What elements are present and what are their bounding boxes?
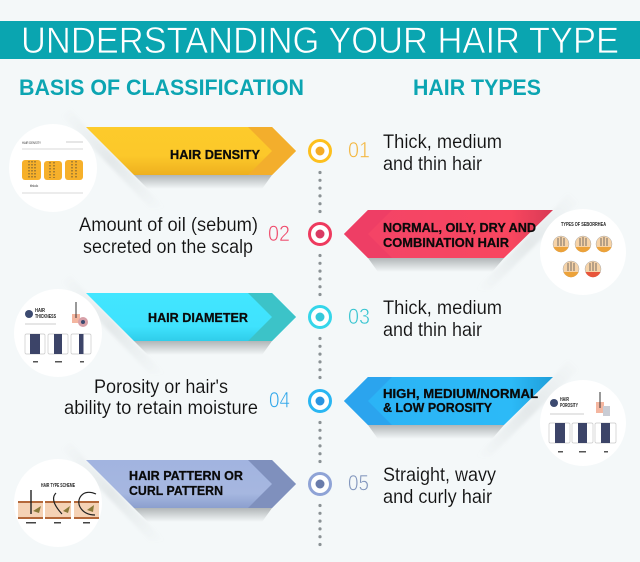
arrow tip: hair density [248, 127, 296, 175]
text: basis 02: secreted on the scalp [83, 236, 253, 258]
text: hair types 03 [383, 297, 502, 341]
thumbnail: types of seborrhea [540, 209, 626, 295]
number 05: 05 [348, 470, 369, 496]
number 03: 03 [348, 304, 370, 329]
label: sebum types: COMBINATION HAIR [383, 236, 509, 250]
arrow tip: sebum types [344, 210, 392, 258]
arrow tip: hair pattern [248, 460, 296, 508]
row 4: high, medium/normal and low porosity [344, 360, 626, 466]
label: hair pattern: HAIR PATTERN OR [129, 469, 243, 483]
thumbnail: hair type scheme [14, 459, 102, 547]
number 02: 02 [268, 221, 290, 246]
text: hair types 03: Thick, medium [383, 297, 502, 319]
thumbnail: hair thickness: THICKNESS [35, 314, 56, 320]
thumbnail: hair porosity [540, 380, 626, 466]
label: porosity: HIGH, MEDIUM/NORMAL [383, 387, 538, 401]
label: hair diameter: HAIR DIAMETER [148, 311, 248, 325]
row 2: marker [310, 224, 330, 244]
text: basis 02: Amount of oil (sebum) [79, 214, 258, 236]
text: basis 02 [79, 214, 258, 258]
row 5: hair pattern or curl pattern [14, 441, 296, 547]
text: hair types 01: Thick, medium [383, 131, 502, 153]
thumbnail: types of seborrhea: TYPES OF SEBORRHEA [561, 222, 606, 228]
text: hair types 05: Straight, wavy [383, 464, 496, 486]
thumbnail: hair type scheme: HAIR TYPE SCHEME [41, 483, 75, 489]
dotted timeline [318, 172, 322, 545]
number 01: 01 [348, 138, 370, 162]
label: hair pattern: CURL PATTERN [129, 484, 223, 498]
label: sebum types: NORMAL, OILY, DRY AND [383, 221, 536, 235]
thumbnail: hair density: HAIR DENSITY [22, 140, 41, 145]
text: hair types 01 [383, 131, 502, 175]
label: sebum types [383, 221, 536, 250]
arrow: hair diameter [86, 293, 296, 341]
label: porosity [383, 387, 538, 415]
arrow: hair density [86, 127, 296, 175]
label: porosity: & LOW POROSITY [383, 401, 493, 415]
arrow tip: porosity [344, 377, 392, 425]
text: hair types 01: and thin hair [383, 153, 482, 175]
row 4: marker [310, 390, 330, 412]
thumbnail: hair thickness [14, 289, 102, 377]
row 2: normal, oily, dry and combination hair [344, 193, 626, 295]
text: basis 04: Porosity or hair's [94, 376, 228, 398]
label: hair density: HAIR DENSITY [170, 148, 261, 162]
heading: basis of classification: BASIS OF CLASSIFICATION [19, 75, 304, 100]
thumbnail: hair density [9, 124, 97, 212]
arrow: hair pattern [86, 460, 296, 508]
thumbnail: hair porosity: POROSITY [560, 403, 578, 409]
thumbnail: hair thickness: HAIR [35, 308, 45, 314]
text: hair types 05: and curly hair [383, 486, 492, 508]
row 5: marker [310, 474, 330, 494]
row 1: hair density [9, 108, 296, 212]
number 04: 04 [269, 388, 290, 412]
arrow: sebum types [344, 210, 553, 258]
text: basis 04: ability to retain moisture [64, 397, 258, 419]
arrow: porosity [344, 377, 553, 425]
text: hair types 05 [383, 464, 496, 508]
thumbnail: hair porosity: HAIR [560, 397, 569, 403]
text: hair types 03: and thin hair [383, 319, 482, 341]
thumbnail: hair density: thick [30, 183, 38, 188]
arrow tip: hair diameter [248, 293, 296, 341]
row 1: marker [310, 140, 330, 162]
row 3: hair diameter [14, 274, 296, 377]
heading: hair types: HAIR TYPES [413, 75, 541, 100]
row 3: marker [310, 306, 330, 328]
label: hair pattern [129, 469, 243, 498]
text: basis 04 [64, 376, 258, 419]
